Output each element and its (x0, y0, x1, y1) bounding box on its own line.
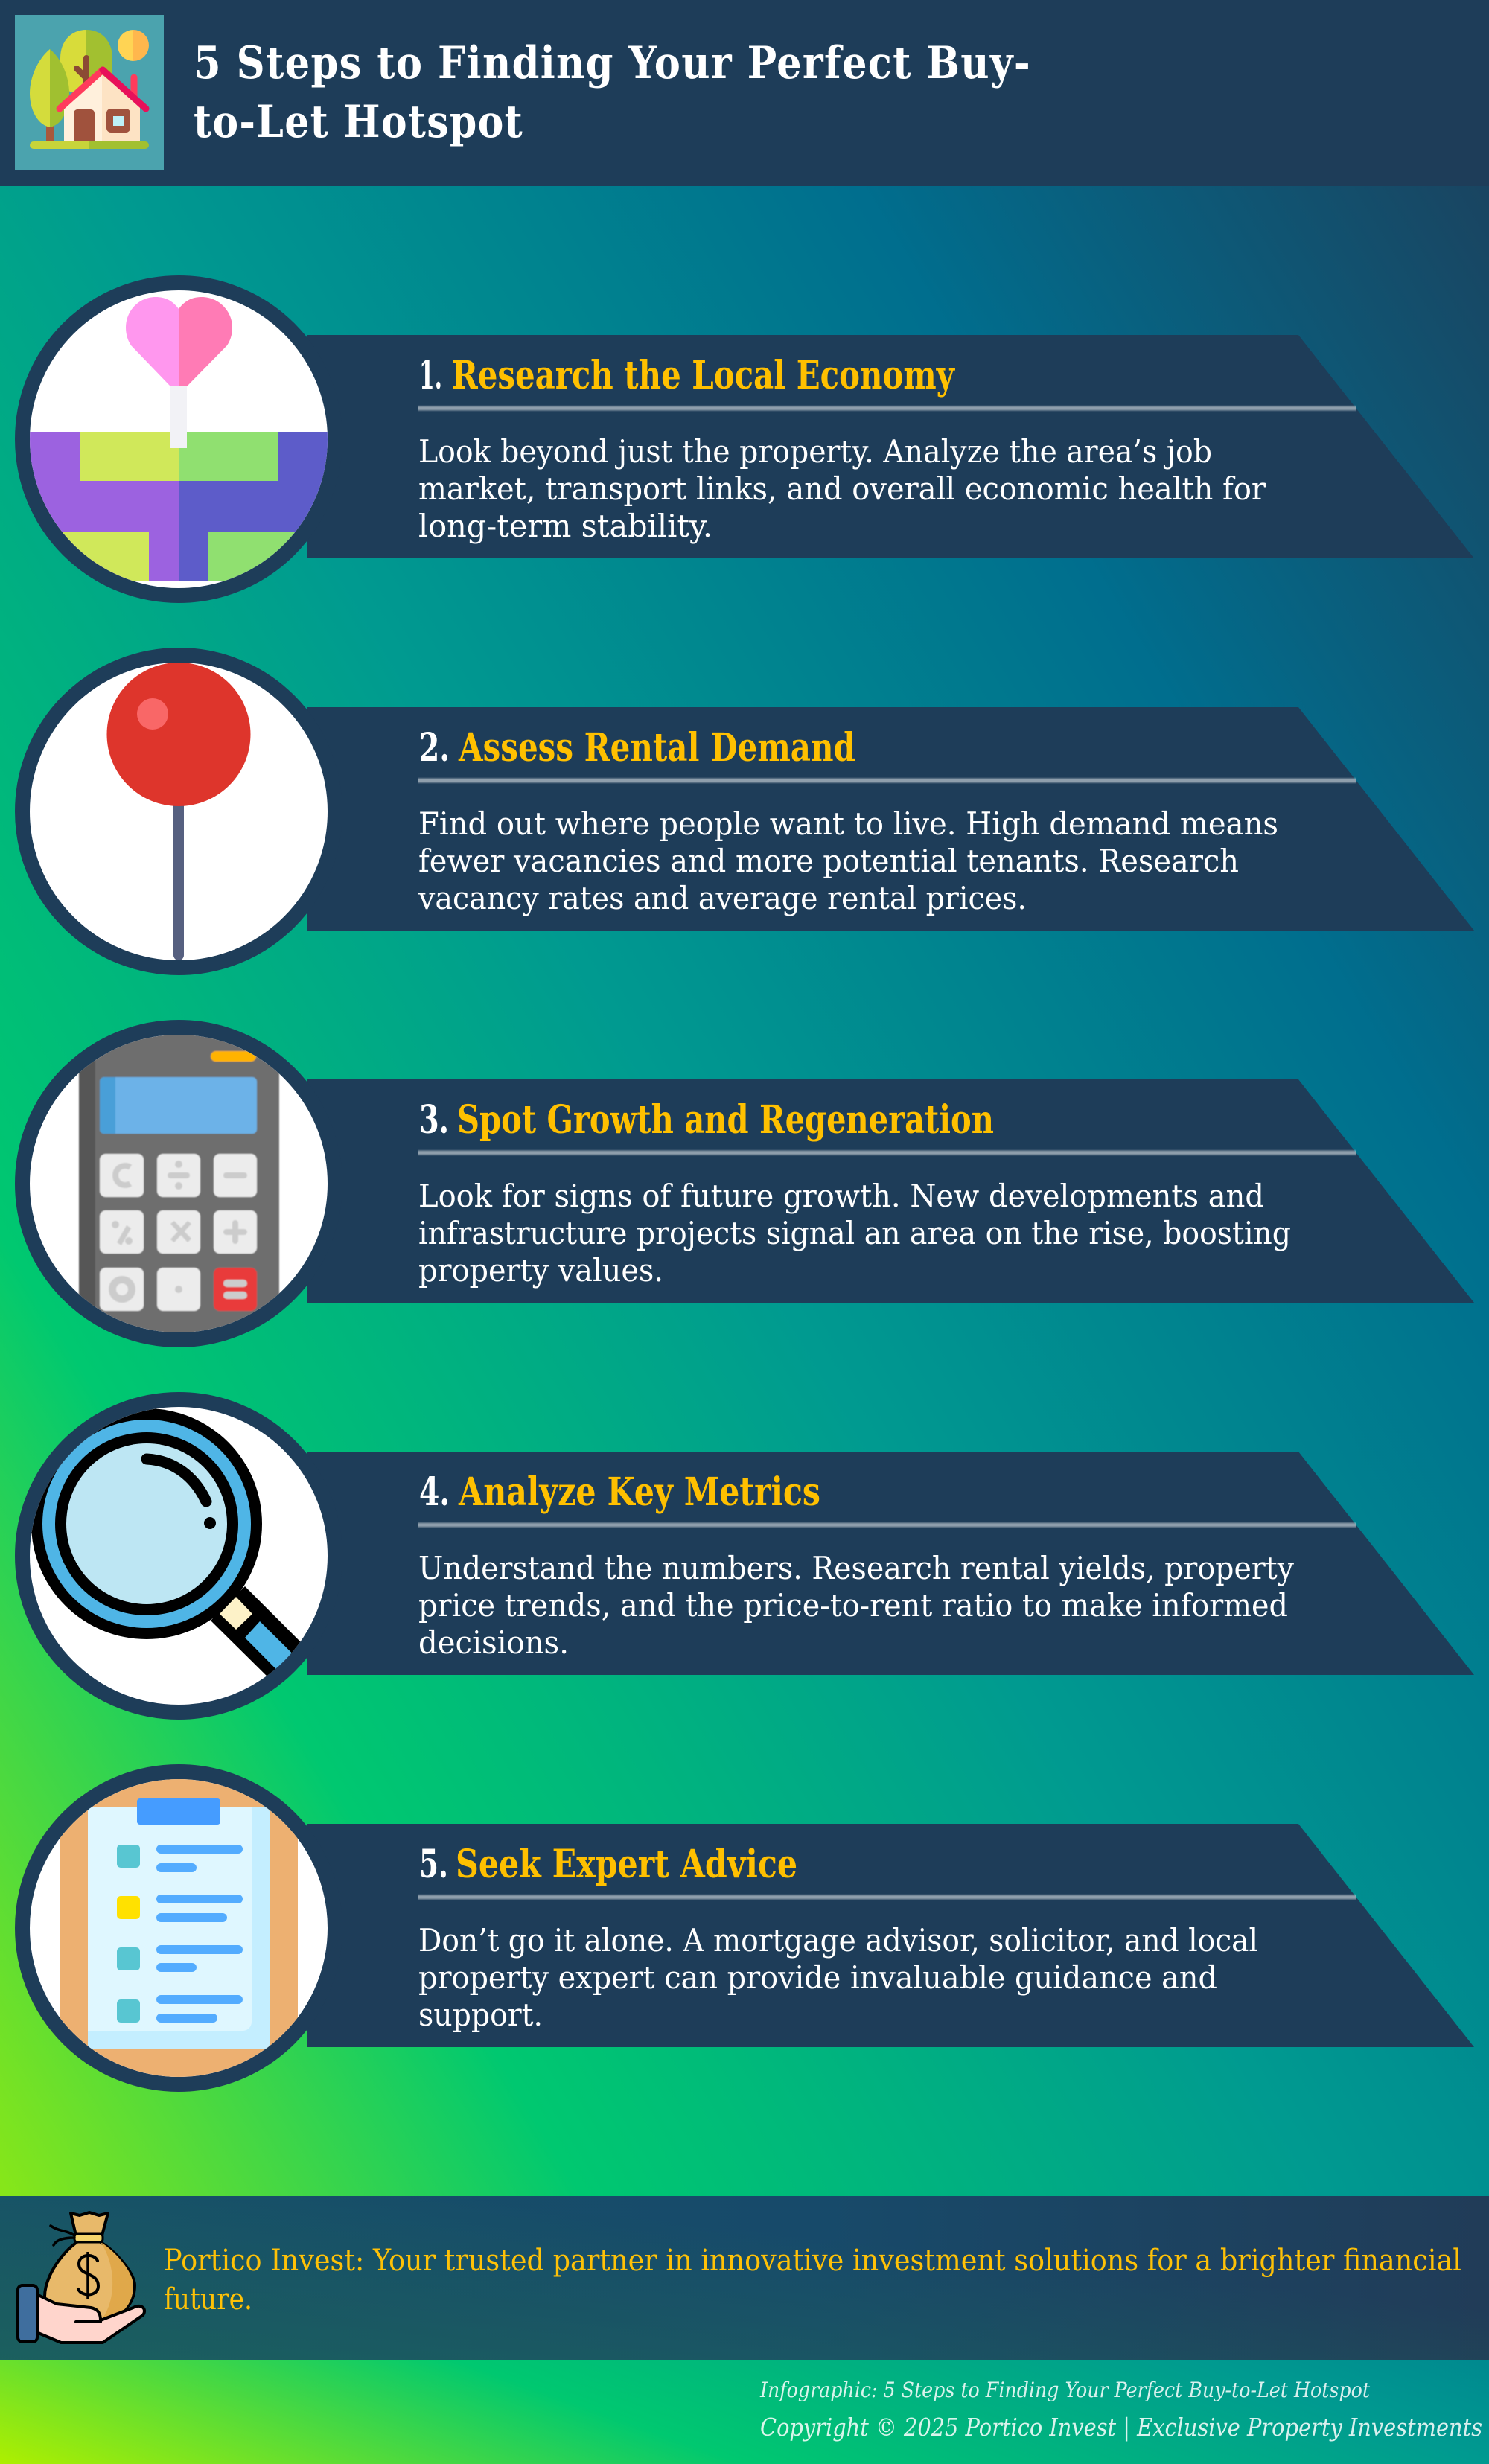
icon: calculator in circle (22, 1027, 335, 1340)
panel: step 5 (22, 1772, 1474, 2084)
step text (418, 805, 1278, 916)
banner (307, 335, 1474, 558)
step text: long-term stability. (418, 508, 712, 544)
title: 5 Steps to Finding Your Perfect Buy- (194, 37, 1031, 89)
step text: property expert can provide invaluable guidance and (418, 1959, 1217, 1996)
company tagline (164, 2244, 1461, 2317)
step heading: Analyze Key Metrics (458, 1469, 820, 1515)
step heading: 2. (419, 725, 450, 770)
step heading: Spot Growth and Regeneration (457, 1097, 994, 1143)
panel: company band (0, 2196, 1489, 2360)
divider (418, 1894, 1356, 1900)
step text: support. (418, 1997, 543, 2033)
step heading: 3. (419, 1097, 449, 1143)
step text: Find out where people want to live. High demand means (418, 805, 1278, 842)
step text: infrastructure projects signal an area on the rise, boosting (418, 1215, 1291, 1251)
footer credits: Infographic: 5 Steps to Finding Your Perfect Buy-to-Let Hotspot (759, 2378, 1371, 2402)
step text: price trends, and the price-to-rent ratio to make informed (418, 1587, 1288, 1624)
step heading: 1. (419, 353, 442, 398)
title (194, 37, 1031, 148)
step heading: Assess Rental Demand (458, 725, 855, 770)
icon: house logo (15, 15, 164, 170)
step text: Understand the numbers. Research rental yields, property (418, 1550, 1294, 1586)
banner (307, 1079, 1474, 1303)
step heading: Seek Expert Advice (456, 1842, 797, 1887)
step text (418, 1178, 1291, 1289)
company tagline: future. (164, 2282, 252, 2317)
panel: step 2 (22, 655, 1474, 968)
divider (418, 405, 1356, 412)
step text (418, 1922, 1258, 2033)
step text: Look for signs of future growth. New developments and (418, 1178, 1264, 1214)
icon: magnifying glass in circle (15, 1392, 328, 1720)
step text: decisions. (418, 1624, 569, 1661)
banner (307, 1452, 1474, 1675)
icon: heart tree in circle (22, 283, 335, 596)
step text: property values. (418, 1252, 663, 1289)
step text: Don’t go it alone. A mortgage advisor, solicitor, and local (418, 1922, 1258, 1959)
title: to-Let Hotspot (194, 96, 523, 148)
panel: step 3 (22, 1027, 1474, 1340)
banner (307, 707, 1474, 931)
icon: money bag in hand (18, 2212, 144, 2343)
step text (418, 433, 1266, 544)
footer credits (759, 2378, 1482, 2442)
panel: step 4 (22, 1399, 1474, 1747)
banner (307, 1824, 1474, 2047)
icon: clipboard checklist in circle (22, 1772, 335, 2084)
panel: step 1 (22, 283, 1474, 596)
icon: map pin in circle (22, 655, 335, 968)
step heading: 5. (419, 1842, 448, 1887)
divider (418, 1522, 1356, 1528)
header bar (0, 0, 1489, 186)
step text (418, 1550, 1294, 1661)
step text: market, transport links, and overall economic health for (418, 470, 1266, 507)
step text: fewer vacancies and more potential tenants. Research (418, 843, 1239, 879)
step text: Look beyond just the property. Analyze the area’s job (418, 433, 1212, 470)
divider (418, 1149, 1356, 1156)
step heading: 4. (419, 1469, 450, 1515)
step text: vacancy rates and average rental prices. (418, 880, 1027, 916)
step heading: Research the Local Economy (452, 353, 955, 398)
footer strip gradient (0, 2360, 1489, 2464)
divider (418, 777, 1356, 784)
